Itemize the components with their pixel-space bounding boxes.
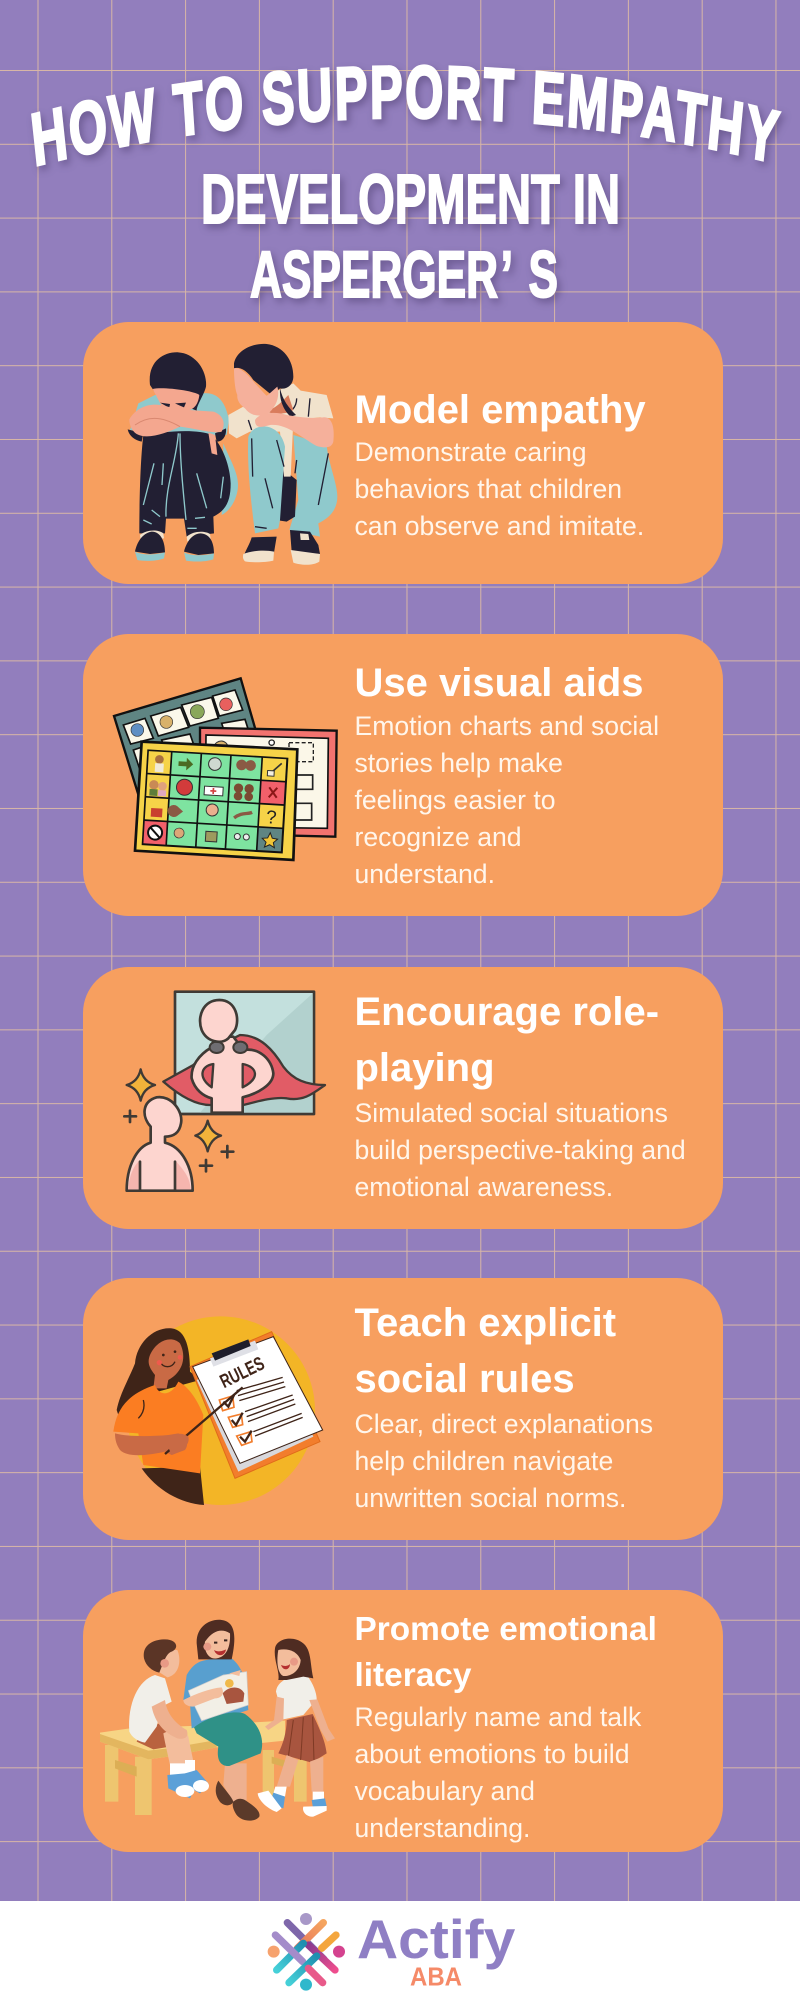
text: model empathy: Demonstrate caring <box>354 437 587 467</box>
text: use visual aids: Emotion charts and social <box>354 711 659 741</box>
panel: encourage role-playing <box>83 967 723 1229</box>
text: promote emotional literacy: Promote emotional <box>354 1611 657 1648</box>
text: model empathy: behaviors that children <box>354 474 622 504</box>
text: encourage role-playing: Encourage role- <box>354 990 659 1034</box>
icon: picture communication boards: ? <box>266 806 277 828</box>
text: teach explicit social rules: Teach explicit <box>354 1301 616 1345</box>
text: encourage role-playing: Simulated social situations <box>354 1098 668 1128</box>
text: use visual aids: feelings easier to <box>354 785 556 815</box>
text: use visual aids <box>354 661 659 889</box>
text: model empathy: Model empathy <box>354 388 646 432</box>
panel: teach explicit social rules <box>83 1278 723 1540</box>
panel: promote emotional literacy <box>83 1590 723 1852</box>
footer logo: Actify ABA: Actify <box>357 1908 516 1970</box>
title: ASPERGER’S <box>250 237 558 311</box>
text: encourage role-playing: emotional awareness. <box>354 1172 613 1202</box>
icon: teacher pointing at rules clipboard: RULES <box>217 1353 268 1393</box>
text: model empathy: can observe and imitate. <box>354 511 644 541</box>
text: teach explicit social rules: Clear, direct explanations <box>354 1409 653 1439</box>
text: use visual aids: stories help make <box>354 748 563 778</box>
text: use visual aids: understand. <box>354 859 495 889</box>
text: teach explicit social rules: unwritten social norms. <box>354 1483 626 1513</box>
text: teach explicit social rules: help children navigate <box>354 1446 613 1476</box>
footer logo: Actify ABA: ABA <box>410 1962 462 1992</box>
text: model empathy <box>354 388 646 541</box>
icon: teacher and children on bench <box>100 1620 335 1821</box>
footer logo: Actify ABA <box>268 1908 516 1992</box>
text: encourage role-playing: playing <box>354 1046 495 1090</box>
text: promote emotional literacy <box>354 1611 657 1843</box>
text: encourage role-playing <box>354 990 686 1202</box>
icon: teacher pointing at rules clipboard <box>113 1316 324 1505</box>
title <box>31 64 786 311</box>
text: promote emotional literacy: literacy <box>354 1657 471 1694</box>
text: promote emotional literacy: Regularly name and talk <box>354 1702 641 1732</box>
text: teach explicit social rules: social rules <box>354 1357 575 1401</box>
text: promote emotional literacy: about emotions to build <box>354 1739 630 1769</box>
text: promote emotional literacy: understanding. <box>354 1813 530 1843</box>
panel: use visual aids <box>83 634 723 916</box>
text: use visual aids: Use visual aids <box>354 661 644 705</box>
text: teach explicit social rules <box>354 1301 653 1513</box>
icon: two sitting children <box>128 344 338 565</box>
panel: model empathy <box>83 322 723 584</box>
text: encourage role-playing: build perspective-taking and <box>354 1135 686 1165</box>
text: promote emotional literacy: vocabulary and <box>354 1776 535 1806</box>
title: HOW TO SUPPORT EMPATHY <box>31 64 786 172</box>
icon: picture communication boards <box>112 676 338 862</box>
text: use visual aids: recognize and <box>354 822 522 852</box>
icon: person and superhero reflection <box>123 990 326 1192</box>
